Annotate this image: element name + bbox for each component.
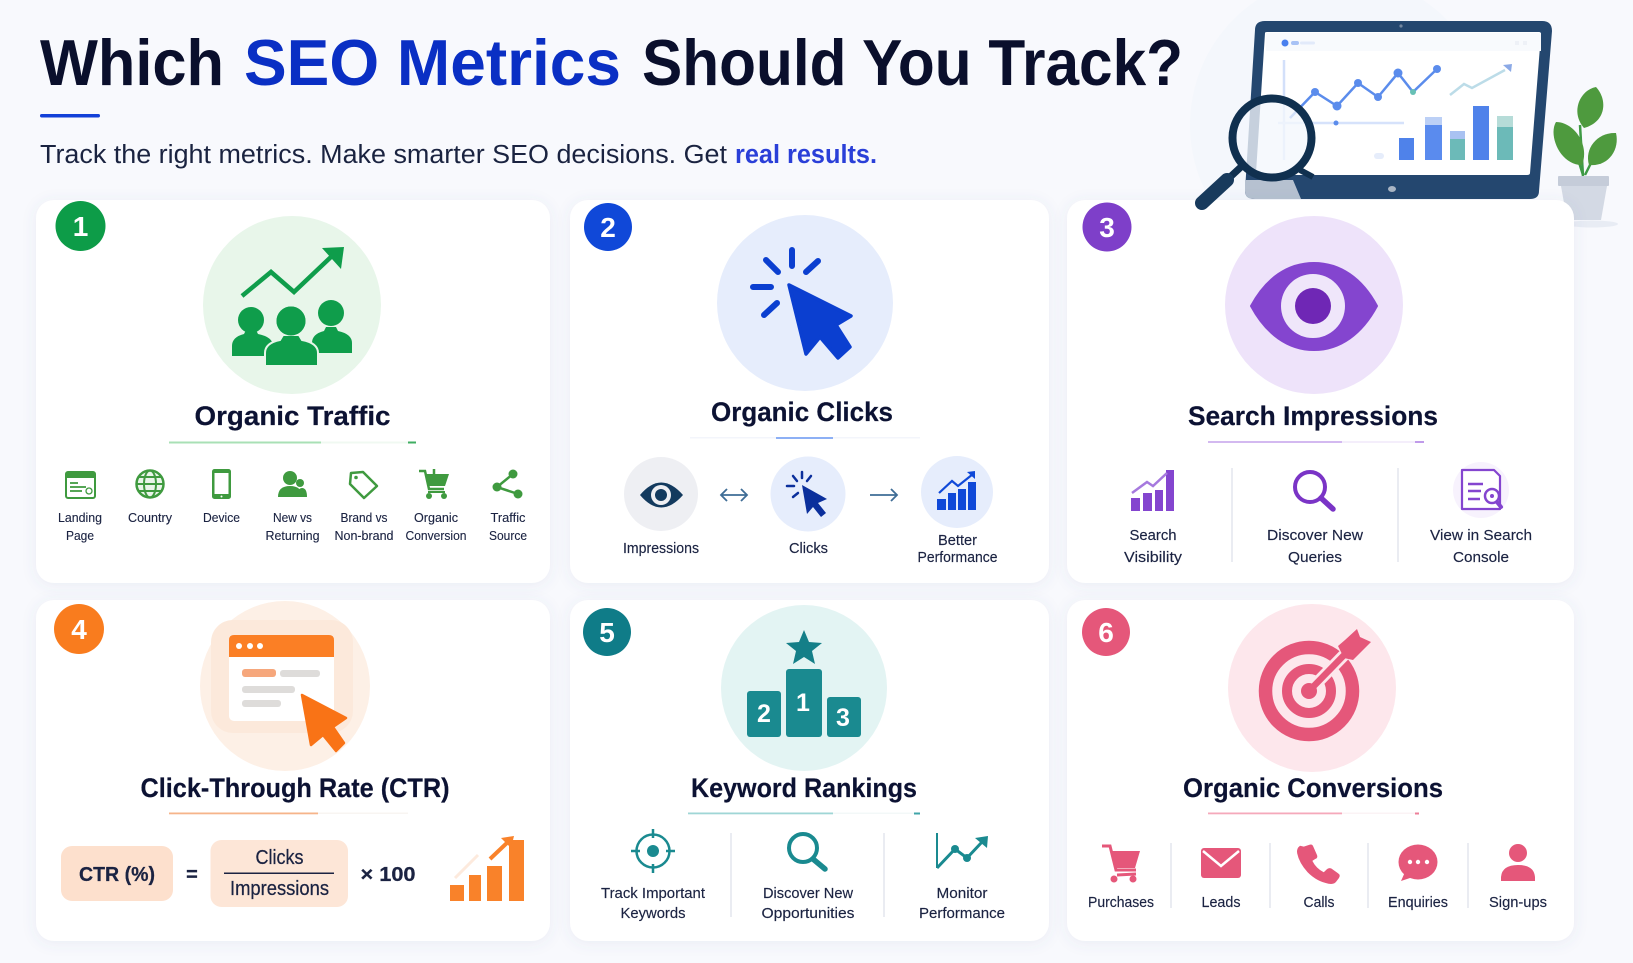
number badge 1 [56,201,106,251]
panel: Organic Traffic [36,200,550,583]
formula: CTR: Clicks [256,847,304,869]
item: Enquiries: Enquiries [1388,895,1448,911]
icon: target with arrow [1228,604,1396,772]
heading underline [1208,441,1424,443]
formula: CTR: CTR (%) [79,864,155,886]
panel: Keyword Rankings [570,600,1049,941]
illustration: potted plant [1554,87,1618,228]
item: Track Important Keywords: Keywords [620,906,686,922]
illustration: magnifying glass [1202,98,1313,203]
formula: CTR [61,840,416,907]
item: Landing Page: Page [66,529,94,543]
formula: CTR: × 100 [360,864,416,886]
number badge 5 [583,608,631,656]
number badge 3: 3 [1099,212,1115,243]
icon: traffic growth and people [203,216,381,394]
item: Organic Conversion: Conversion [406,529,467,543]
formula: CTR: Impressions [230,878,329,900]
illustration: laptop with analytics dashboard [1190,0,1552,275]
number badge 2: 2 [600,212,616,243]
heading underline [169,442,416,444]
icon: podium with star: 1 [796,689,810,717]
icon: podium with star [721,605,887,771]
item: Enquiries [1388,844,1448,911]
item: Landing Page: Landing [58,511,102,525]
arrow: clicks to better performance [870,489,897,501]
item: Country: Country [128,511,173,525]
item: Purchases [1088,846,1154,911]
item: New vs Returning [266,471,320,543]
item: View in Search Console: Console [1453,550,1509,566]
item: Clicks [770,456,846,557]
title: Should You Track? [642,26,1183,99]
item: Traffic Source [489,470,527,543]
item: View in Search Console [1430,462,1532,566]
item: Organic Conversion [406,469,467,543]
title accent rule [40,114,100,118]
item: Calls [1297,845,1340,911]
icon: eye [1225,216,1403,394]
subtitle: real results. [735,141,877,169]
item: Discover New Opportunities: Opportunities [762,906,854,922]
icon: rising bars [450,836,524,901]
item: Impressions: Impressions [623,541,699,557]
item: Discover New Queries: Discover New [1267,528,1364,544]
item: Search Visibility [1124,470,1183,566]
heading: Search Impressions [1188,401,1438,431]
heading: Organic Traffic [194,401,390,431]
item: Country [128,470,173,525]
title: SEO Metrics [244,26,621,99]
item: Brand vs Non-brand [334,472,394,543]
panel: Organic Clicks [570,200,1049,583]
heading: Click-Through Rate (CTR) [140,773,450,803]
subtitle: Track the right metrics. Make smarter SEO decisions. Get [40,141,727,169]
item: Discover New Queries [1267,472,1364,566]
item: New vs Returning: New vs [273,511,312,525]
item: Traffic Source: Source [489,529,527,543]
heading: Organic Clicks [711,397,893,427]
heading: Keyword Rankings [691,773,917,803]
item: Monitor Performance: Performance [919,906,1005,922]
formula: CTR: = [186,864,198,886]
item: Impressions [623,457,699,557]
panel: Click-Through Rate [36,600,550,941]
number badge 1: 1 [73,211,88,242]
item: Landing Page [58,472,102,543]
number badge 4 [54,604,104,654]
item: Purchases: Purchases [1088,895,1154,911]
item: Track Important Keywords: Track Important [601,886,705,902]
number badge 3 [1082,202,1132,252]
heading underline [688,812,920,814]
item: Clicks: Clicks [789,541,828,557]
icon: browser window with cursor [200,601,370,771]
heading underline [169,812,408,814]
item: Monitor Performance [919,833,1005,922]
item: Device [203,469,240,525]
item: Brand vs Non-brand: Non-brand [334,529,394,543]
item: Traffic Source: Traffic [490,511,526,525]
arrow: two-way between impressions and clicks [721,489,747,501]
item: Track Important Keywords [601,829,705,922]
item: Monitor Performance: Monitor [936,886,988,902]
heading underline [690,437,920,439]
item: Leads [1201,848,1241,911]
item: New vs Returning: Returning [266,529,320,543]
item: Better Performance: Better [938,533,977,549]
heading: Organic Conversions [1183,773,1443,803]
item: View in Search Console: View in Search [1430,528,1532,544]
item: Discover New Opportunities: Discover New [763,886,854,902]
icon: podium with star: 3 [836,704,850,732]
item: Calls: Calls [1304,895,1334,911]
item: Search Visibility: Search [1130,528,1176,544]
item: Better Performance: Performance [918,550,998,566]
panel: Organic Conversions [1067,600,1574,941]
item: Search Visibility: Visibility [1124,550,1183,566]
item: Brand vs Non-brand: Brand vs [340,511,388,525]
number badge 6: 6 [1098,617,1114,648]
panel: Search Impressions [1067,200,1574,583]
number badge 2 [584,203,632,251]
item: Sign-ups: Sign-ups [1489,895,1547,911]
number badge 4: 4 [71,614,87,645]
item: Device: Device [203,511,240,525]
number badge 6 [1082,608,1130,656]
item: Discover New Opportunities [762,834,854,922]
title [40,26,1183,99]
icon: podium with star: 2 [757,700,771,728]
item: Leads: Leads [1202,895,1240,911]
heading underline [1208,812,1419,814]
title: Which [40,26,224,99]
item: Better Performance [918,456,998,566]
number badge 5: 5 [599,617,615,648]
item: Discover New Queries: Queries [1288,550,1342,566]
icon: cursor click [717,215,893,391]
item: Organic Conversion: Organic [414,511,458,525]
item: Sign-ups [1489,844,1547,911]
